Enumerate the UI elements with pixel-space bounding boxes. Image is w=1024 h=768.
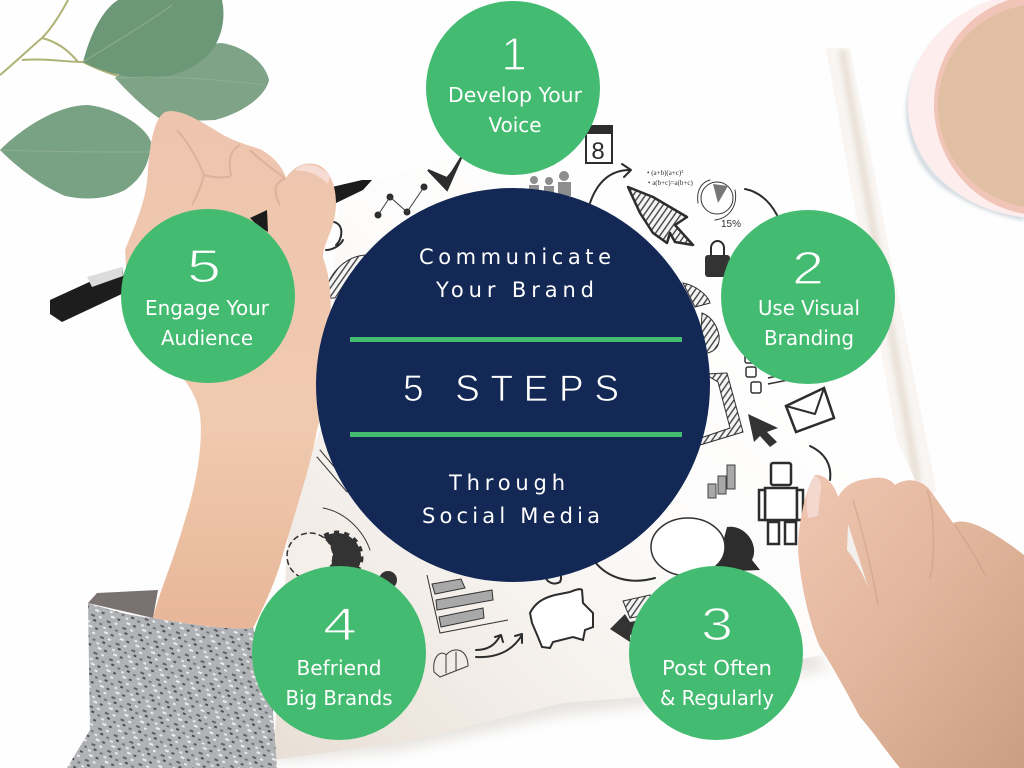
heading: through social media (422, 471, 600, 528)
icon: cursor (748, 414, 778, 447)
step 4: 4 (323, 598, 357, 650)
icon: tea cup (326, 222, 343, 250)
icon: pen tip (332, 180, 372, 204)
icon: laptop (695, 373, 743, 445)
step 4: Big Brands (286, 686, 392, 710)
icon: hatched hat (325, 255, 366, 298)
step 1: Develop Your (448, 83, 583, 107)
icon: arrows to piggy (476, 634, 522, 657)
icon: circular arrow to rocket (590, 164, 631, 203)
step 4: Befriend (296, 656, 382, 680)
heading: communicate your brand (419, 245, 611, 302)
step 3: Post Often (662, 656, 772, 680)
step 5: 5 (187, 240, 221, 292)
icon: math formulas: • a(b+c)=a(b+c) (648, 179, 693, 187)
icon: curved arrow to robot (810, 446, 830, 480)
step 3 (629, 566, 803, 740)
icon: check mark (428, 156, 462, 190)
icon: speech bubbles (651, 518, 760, 576)
heading: through social media: Through (448, 471, 565, 495)
icon: thumb gap (847, 524, 871, 596)
step 1: 1 (501, 28, 527, 80)
icon: calendar: 8 (591, 138, 605, 165)
step 5: Engage Your (145, 296, 270, 320)
notebook (270, 48, 936, 762)
left hand and forearm (125, 111, 336, 628)
icon: pen body (50, 267, 126, 322)
icon: thumbnail (295, 165, 330, 184)
step 1: Voice (488, 113, 542, 137)
icon: bar chart (708, 465, 735, 498)
doodles (287, 126, 834, 677)
step 3: 3 (701, 598, 733, 650)
icon: right thumbnail (807, 476, 821, 518)
step 5 (121, 209, 295, 383)
icon: pie gauge 15% (698, 180, 741, 230)
step 2: 2 (792, 242, 824, 294)
icon: pen between fingers (250, 210, 268, 232)
step 2: Branding (764, 326, 854, 350)
icon: math formulas: • (a+b)(a+c)² (647, 169, 683, 177)
heading: through social media: Social Media (422, 504, 600, 528)
icon: hatched shapes (683, 283, 719, 354)
icon: network (374, 184, 428, 218)
icon: hatched arrows (610, 595, 652, 642)
icon: group of people (434, 650, 468, 677)
heading: communicate your brand: Your Brand (435, 278, 594, 302)
icon: envelope (786, 388, 834, 432)
icon: leaves (0, 0, 269, 198)
icon: robot (759, 463, 803, 544)
icon: finger folds (177, 130, 286, 205)
step 4 (252, 566, 426, 740)
step 3: & Regularly (660, 686, 774, 710)
icon: pie gauge 15%: 15% (721, 219, 741, 230)
icon: piggy bank (530, 589, 593, 648)
step 2: Use Visual (758, 296, 860, 320)
step 2 (721, 210, 895, 384)
step 5: Audience (161, 326, 253, 350)
icon: gears (287, 533, 397, 589)
central circle (316, 188, 710, 582)
icon: coffee cup (908, 0, 1024, 218)
icon: math formulas (647, 169, 693, 187)
step 1 (426, 1, 600, 175)
icon: rocket (628, 187, 693, 245)
sweater sleeve (67, 590, 277, 768)
icon: curved arrow and lines (317, 450, 370, 550)
icon: checklist (745, 354, 788, 393)
title: 5 steps: 5 STEPS (403, 368, 619, 409)
heading: communicate your brand: Communicate (419, 245, 611, 269)
icon: padlock (705, 241, 730, 277)
icon: calendar (586, 126, 612, 165)
icon: people (529, 171, 571, 198)
icon: globe (545, 576, 561, 584)
right hand (798, 475, 1024, 768)
icon: horizontal bar chart (427, 575, 508, 633)
